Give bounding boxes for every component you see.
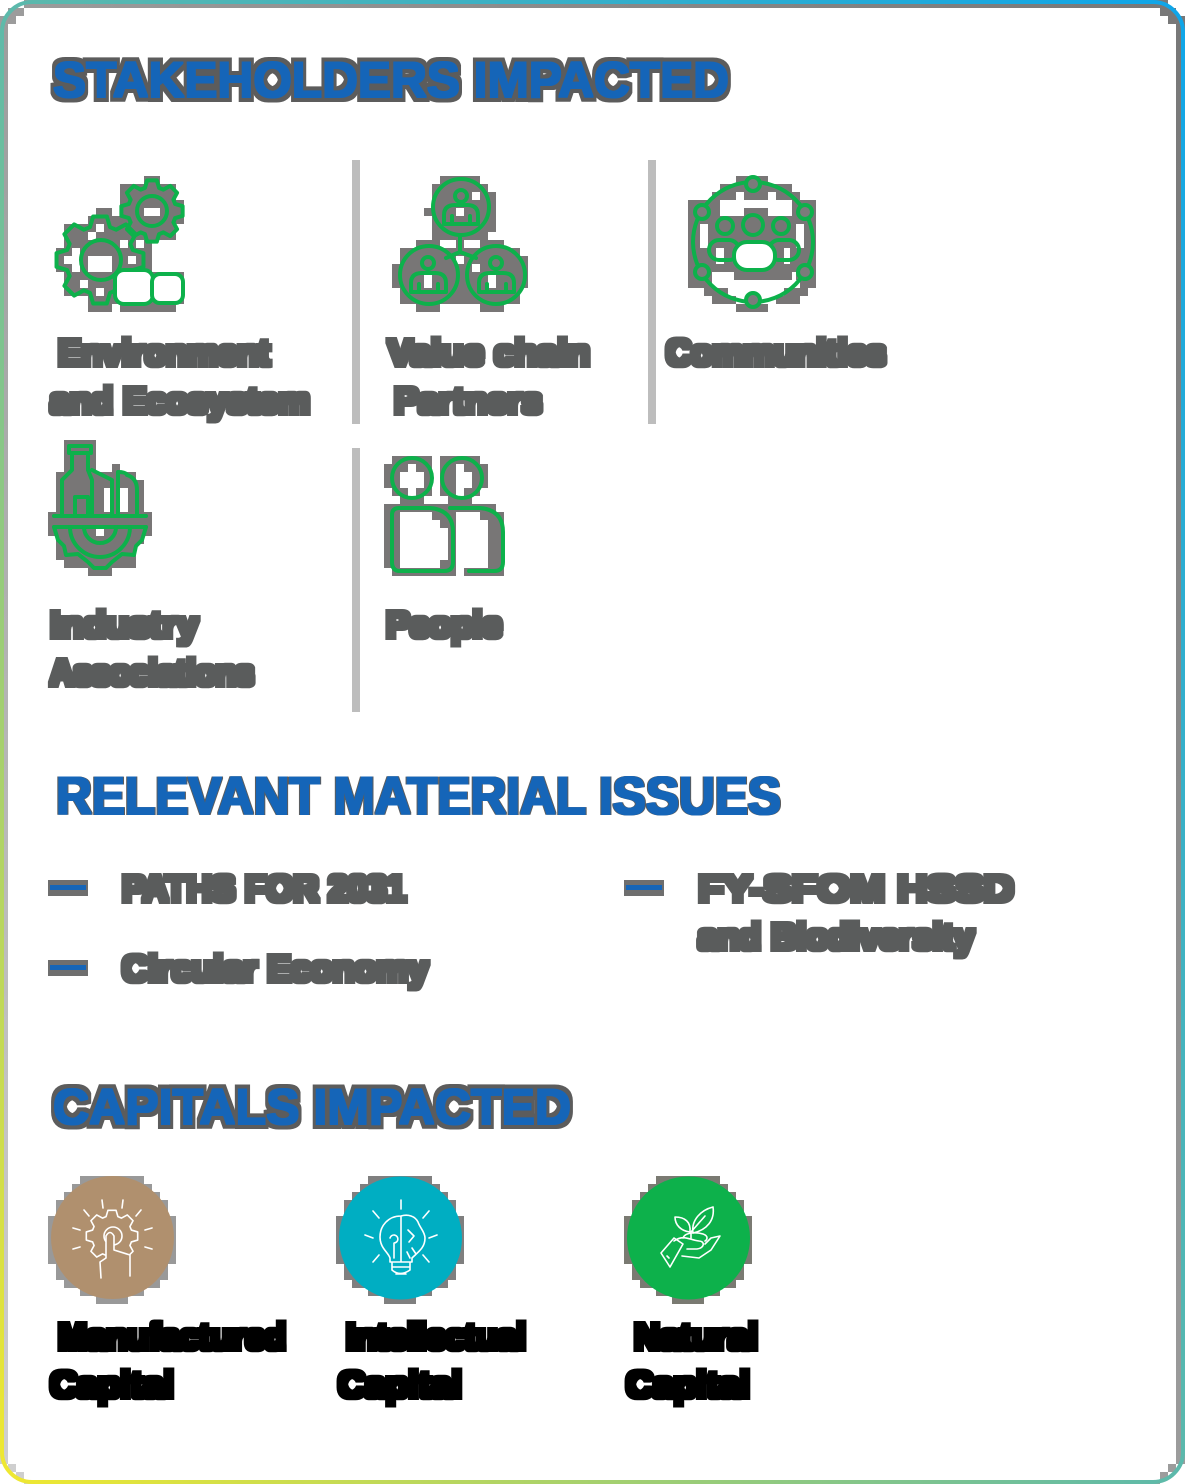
stakeholder: communities xyxy=(666,176,886,373)
label: and ecosystem: and Ecosystem xyxy=(50,380,310,421)
issue text line 1: FY-SFOM HSSD xyxy=(698,868,1014,909)
capital: natural xyxy=(624,1176,758,1405)
icon: three linked people xyxy=(392,176,528,312)
icon: two people xyxy=(384,456,504,576)
icon: gears with blocks xyxy=(56,176,184,312)
label: associations: Associations xyxy=(50,652,254,693)
issue text: PATHS FOR 2031 xyxy=(122,868,406,909)
heading: stakeholders impacted: STAKEHOLDERS IMPACTED xyxy=(53,52,729,108)
label: value chain: Value chain xyxy=(388,332,590,373)
divider: stakeholders second row xyxy=(352,448,360,712)
label: industry: Industry xyxy=(50,604,198,645)
label: partners: Partners xyxy=(394,380,542,421)
stakeholder: environment and ecosystem xyxy=(50,176,310,421)
label: capital: Capital xyxy=(626,1364,750,1405)
label: capital: Capital xyxy=(338,1364,462,1405)
capital: intellectual xyxy=(336,1176,526,1405)
capital: manufactured xyxy=(48,1176,286,1405)
icon: lightbulb with brain xyxy=(336,1176,464,1304)
label: people: People xyxy=(386,604,502,645)
heading: capitals impacted: CAPITALS IMPACTED xyxy=(53,1079,571,1135)
label: manufactured: Manufactured xyxy=(58,1316,286,1357)
material issue: circular economy xyxy=(48,948,428,989)
divider: stakeholders column 2 xyxy=(648,160,656,424)
label: intellectual: Intellectual xyxy=(346,1316,526,1357)
label: environment: Environment xyxy=(58,332,270,373)
icon: bottles on gear xyxy=(48,440,152,576)
label: capital: Capital xyxy=(50,1364,174,1405)
stakeholder: people xyxy=(384,456,504,645)
bullet dash xyxy=(624,880,664,896)
icon: plant in hand xyxy=(624,1176,752,1304)
icon: gear and pointing hand xyxy=(48,1176,176,1304)
label: natural: Natural xyxy=(634,1316,758,1357)
material issue: first item xyxy=(48,868,406,909)
bullet dash xyxy=(48,960,88,976)
issue text: Circular Economy xyxy=(122,948,428,989)
material issue: biodiversity xyxy=(624,868,1014,957)
bullet dash xyxy=(48,880,88,896)
stakeholder: industry associations xyxy=(48,440,254,693)
stakeholder: value chain partners xyxy=(388,176,590,421)
icon: community ring xyxy=(688,176,816,312)
label: communities: Communities xyxy=(666,332,886,373)
divider: stakeholders column 1 xyxy=(352,160,360,424)
issue text line 2: and Biodiversity xyxy=(698,916,974,957)
heading: relevant material issues: RELEVANT MATERIAL ISSUES xyxy=(56,767,781,826)
